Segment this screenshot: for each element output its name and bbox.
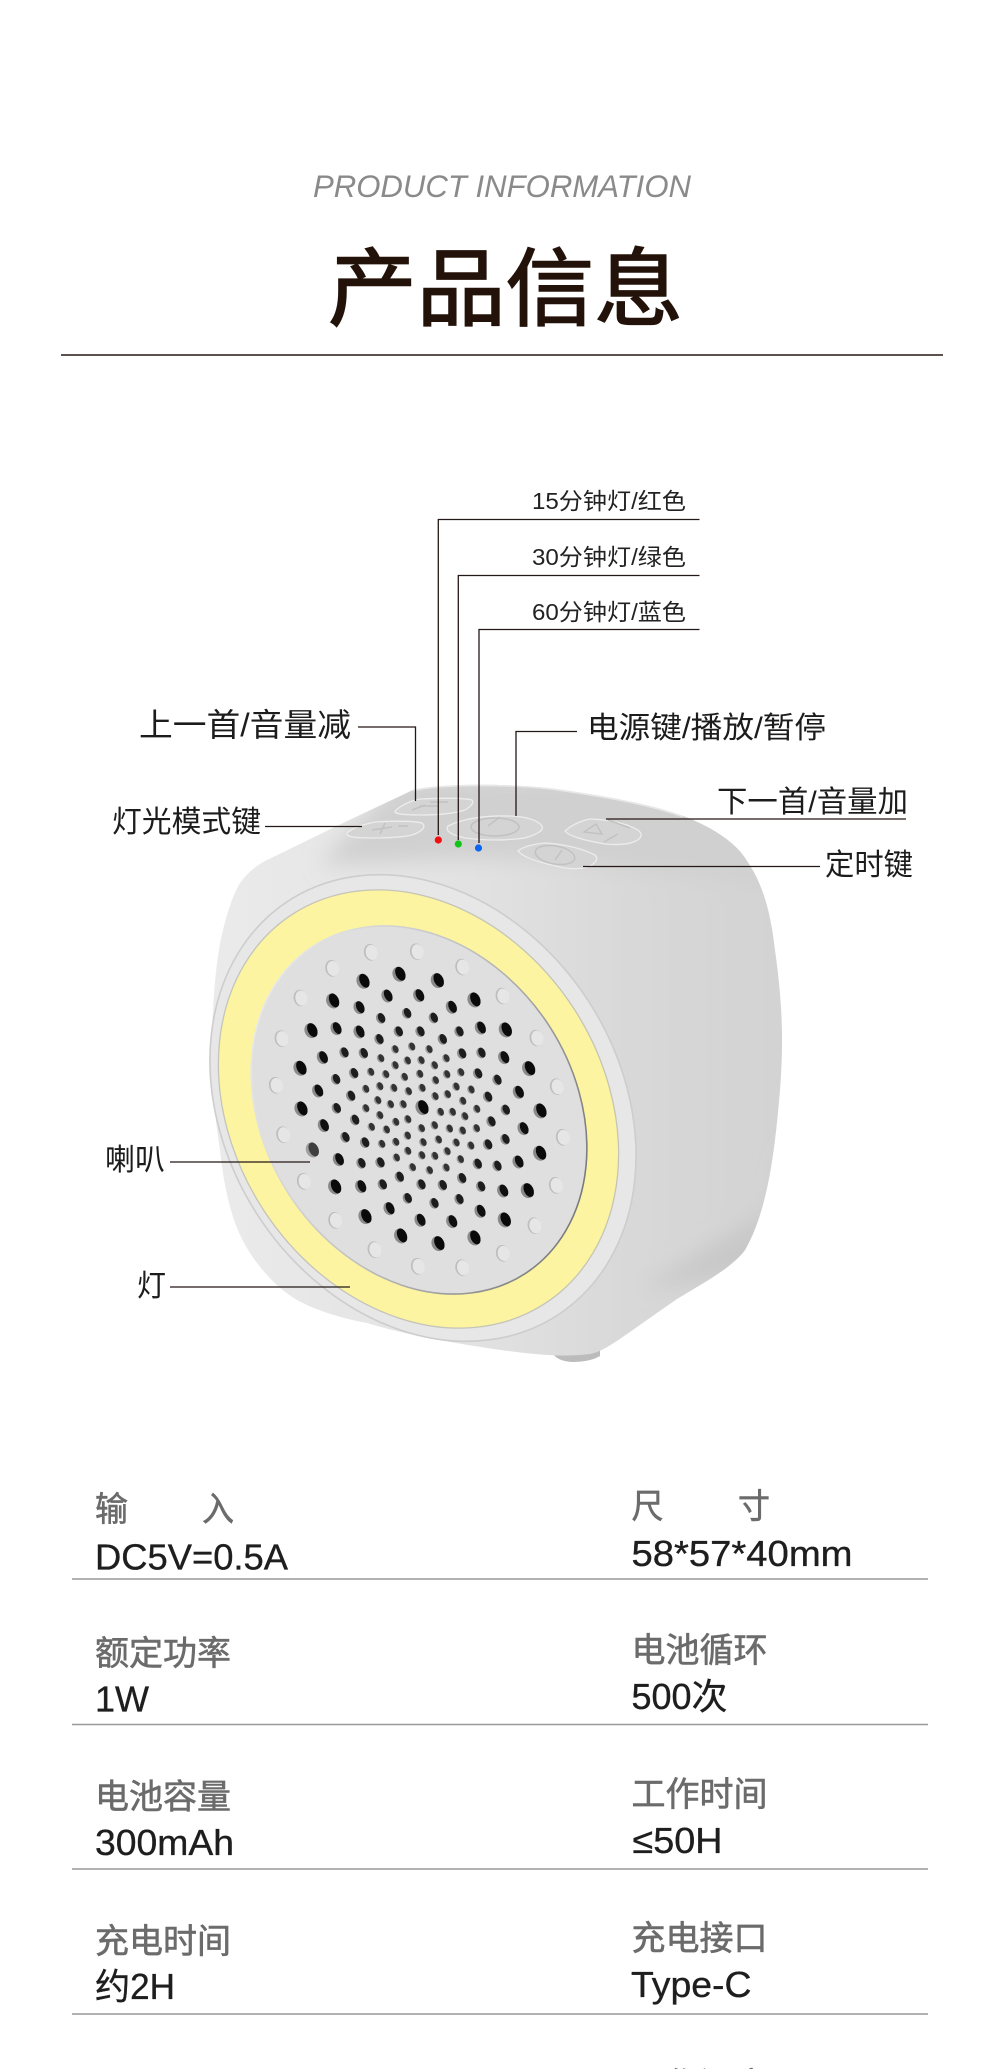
spec: charging time bbox=[95, 1923, 231, 2007]
callout: light mode key: 灯光模式键 bbox=[112, 806, 261, 839]
spec: charging port: Type-C bbox=[631, 1964, 752, 2005]
spec: size bbox=[632, 1488, 852, 1574]
callout: speaker: 喇叭 bbox=[105, 1144, 165, 1177]
spec: working time bbox=[632, 1776, 768, 1861]
spec: battery cycles: 电池循环 bbox=[632, 1632, 768, 1670]
spec: battery cycles: 500次 bbox=[632, 1676, 728, 1717]
spec: battery capacity: 300mAh bbox=[95, 1822, 234, 1863]
spec: charging time: 约2H bbox=[95, 1966, 175, 2007]
spec: input: DC5V=0.5A bbox=[95, 1536, 288, 1578]
grille holes and bumps bbox=[267, 942, 571, 1277]
speaker body bbox=[200, 778, 800, 1370]
callout: next / volume up: 下一首/音量加 bbox=[717, 786, 908, 819]
button: light mode bbox=[347, 821, 424, 838]
indicator light: blue bbox=[475, 844, 482, 852]
spec: charging time: 充电时间 bbox=[95, 1923, 231, 1961]
indicator light: green bbox=[455, 840, 462, 848]
spec: rated power bbox=[95, 1635, 231, 1720]
indicator light: red bbox=[435, 836, 442, 844]
callout: 60 minute light / blue bbox=[479, 599, 700, 843]
spec: size: 58*57*40mm bbox=[632, 1533, 852, 1574]
spec: size: 寸 bbox=[738, 1488, 770, 1526]
callout: 60 minute light / blue: 60分钟灯/蓝色 bbox=[532, 599, 686, 625]
button: power / play bbox=[447, 816, 542, 840]
spec: working time: ≤50H bbox=[632, 1820, 722, 1861]
callout: previous / volume down: 上一首/音量减 bbox=[139, 707, 351, 743]
callout: timer key: 定时键 bbox=[825, 849, 913, 882]
speaker foot bbox=[552, 1350, 600, 1362]
callout: power / play / pause bbox=[516, 712, 826, 816]
callout: previous / volume down bbox=[139, 707, 416, 801]
front frame ring bbox=[123, 794, 723, 1422]
title divider bbox=[61, 354, 943, 356]
spec table bbox=[72, 1488, 928, 2069]
callout: 15 minute light / red bbox=[438, 488, 700, 835]
spec: input: 入 bbox=[202, 1491, 234, 1529]
spec: rated power: 1W bbox=[95, 1678, 149, 1720]
subtitle: PRODUCT INFORMATION: PRODUCT INFORMATION bbox=[313, 168, 691, 204]
speaker grille bbox=[183, 862, 655, 1358]
spec: working time: 工作时间 bbox=[632, 1776, 768, 1814]
spec: battery capacity: 电池容量 bbox=[95, 1778, 231, 1816]
callout: 30 minute light / green bbox=[458, 544, 700, 840]
button: next / volume up bbox=[565, 819, 641, 845]
spec: charging port bbox=[631, 1920, 768, 2005]
spec: input: 输 bbox=[95, 1491, 128, 1529]
callout: light: 灯 bbox=[137, 1270, 166, 1303]
spec: rated power: 额定功率 bbox=[95, 1635, 231, 1673]
spec: charging port: 充电接口 bbox=[632, 1920, 768, 1958]
button: timer bbox=[518, 843, 597, 869]
spec: battery capacity bbox=[95, 1778, 234, 1863]
title: 产品信息: 产品信息 bbox=[328, 243, 683, 338]
callout: 15 minute light / red: 15分钟灯/红色 bbox=[532, 488, 686, 514]
callout: power / play / pause: 电源键/播放/暂停 bbox=[587, 712, 826, 745]
button: previous / volume down bbox=[395, 798, 473, 815]
light ring: yellow bbox=[137, 814, 700, 1404]
spec: battery cycles bbox=[632, 1632, 768, 1717]
spec: size: 尺 bbox=[632, 1488, 664, 1526]
product illustration: speaker bbox=[209, 784, 782, 1362]
callout: 30 minute light / green: 30分钟灯/绿色 bbox=[532, 544, 686, 570]
spec: input bbox=[95, 1491, 288, 1578]
